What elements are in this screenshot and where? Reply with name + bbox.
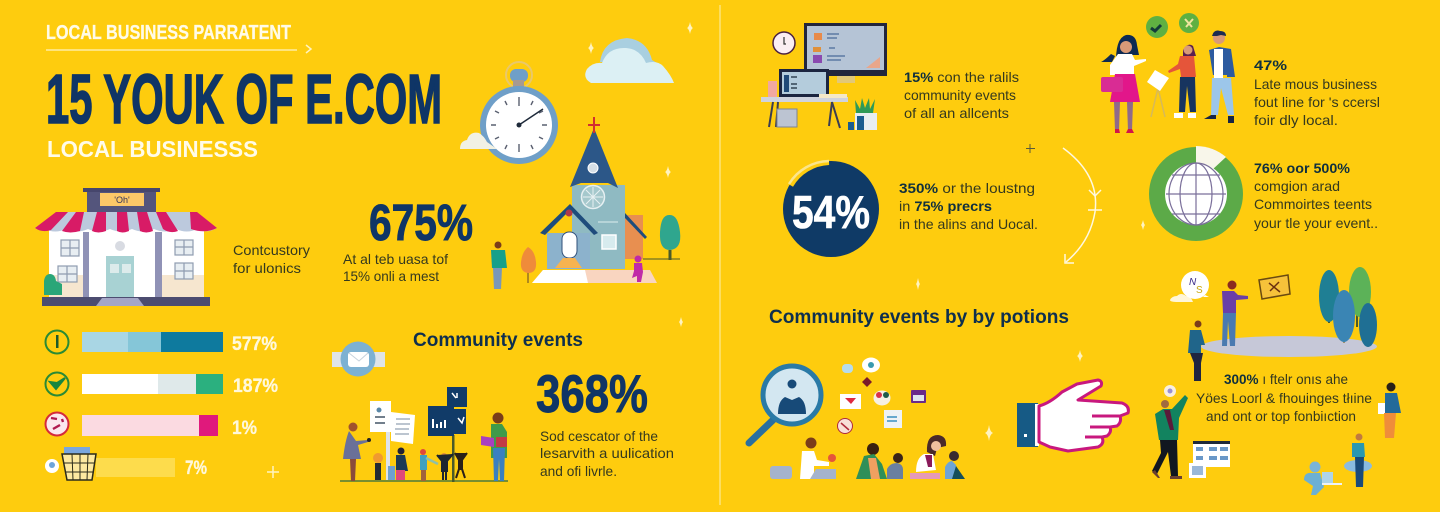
main title: 15 YOUK OF E.COM <box>46 60 442 138</box>
text: 47% <box>1254 57 1380 128</box>
text: 47%: fout line for 's ccersl <box>1254 94 1380 110</box>
speech bubble <box>1170 271 1209 302</box>
trees <box>1319 267 1377 347</box>
person lower <box>1344 434 1372 487</box>
seated woman <box>910 435 946 479</box>
dark plus <box>1026 144 1035 153</box>
children group <box>373 448 467 481</box>
donut: 54%: 54% <box>792 186 870 238</box>
bar row 2: 187% <box>233 376 278 397</box>
icon: pointing hand <box>1017 380 1128 451</box>
person with bag <box>343 422 371 481</box>
donut: globe <box>1149 146 1243 241</box>
person right <box>1378 382 1401 438</box>
man with jacket <box>1204 31 1235 123</box>
seated child <box>887 453 903 479</box>
arrow: curved <box>1063 148 1102 263</box>
text: 76%: comgion arad <box>1254 178 1340 194</box>
text: 47%: Late mous business <box>1254 76 1377 92</box>
speech bubble: N <box>1189 277 1197 288</box>
icon: calendar <box>1189 441 1230 478</box>
bar row 4: 7% <box>185 458 207 479</box>
person: green coat <box>1152 385 1188 479</box>
illustration: storefront: 'Oh' <box>114 195 130 205</box>
sign <box>1259 275 1290 299</box>
eyebrow heading: LOCAL BUSINESS PARRATENT <box>46 22 291 44</box>
text: 15%: of all an allcents <box>904 105 1009 121</box>
stat: 675%: 15% onli a mest <box>343 268 439 284</box>
bar chart <box>45 330 278 480</box>
text: 350%: in the alins and Uocal. <box>899 216 1038 232</box>
woman <box>1101 35 1146 133</box>
text: 300% <box>1196 371 1372 424</box>
bar row 1: 577% <box>232 334 277 355</box>
illustration: cloud <box>585 38 674 83</box>
person teal <box>1188 320 1205 381</box>
text: 76%: your tle your event.. <box>1254 215 1378 231</box>
text: 76% <box>1254 160 1378 231</box>
caption: store: for ulonics <box>233 260 301 276</box>
text: 76%: Commoirtes teents <box>1254 196 1372 212</box>
illustration: community signs <box>340 387 508 482</box>
illustration: people seated <box>770 435 965 479</box>
speech bubble: S <box>1196 285 1203 296</box>
stat: 368%: and ofi livrle. <box>540 463 617 479</box>
text: 15%: 15% con the ralils <box>904 69 1019 85</box>
caption: store: Contcustory <box>233 242 310 258</box>
text: 15% <box>904 69 1019 121</box>
bar row 4 <box>45 447 207 480</box>
text: 76%: 76% oor 500% <box>1254 160 1351 176</box>
seated girl <box>945 451 965 479</box>
text: 47%: foir dly local. <box>1254 112 1338 128</box>
person in pink <box>632 256 643 282</box>
stat: 368%: lesarvith a uulication <box>540 445 674 461</box>
illustration: church <box>491 117 680 289</box>
stat: 675% <box>343 194 473 284</box>
text: 47%: 47% <box>1254 57 1288 73</box>
stat: 675%: At al teb uasa tof <box>343 251 448 267</box>
heading: community events by potions: Community events by by potions <box>769 307 1069 328</box>
subtitle: LOCAL BUSINESSS <box>47 136 258 162</box>
stat: 368% <box>536 365 674 479</box>
sparkle <box>267 466 279 478</box>
seated person 1 <box>800 438 836 479</box>
floating icons <box>838 358 926 434</box>
bar row 3: 1% <box>232 418 257 439</box>
text: 350%: in 75% precrs <box>899 198 992 214</box>
stat: 368%: Sod cescator of the <box>540 428 658 444</box>
illustration: magnifier <box>749 366 821 443</box>
person with book <box>481 412 507 481</box>
middle person <box>1168 45 1196 118</box>
seated person 2 <box>856 443 887 479</box>
illustration: desk with computer <box>761 23 887 130</box>
sparkles <box>588 22 1145 441</box>
bar row 2 <box>46 372 278 397</box>
icon: envelope badge <box>332 342 385 376</box>
text: 300%: Yöes Loorl & fhouinges tłıine <box>1196 390 1372 406</box>
bar row 3 <box>46 412 257 439</box>
eyebrow heading <box>46 22 311 53</box>
heading: community events: Community events <box>413 330 583 351</box>
illustration: storefront <box>35 188 217 306</box>
text: 300%: 300% ı ftelr onıs ahe <box>1224 371 1348 387</box>
text: 300%: and ont or top fonbiıction <box>1206 408 1356 424</box>
stat: 368%: 368% <box>536 365 648 424</box>
text: 15%: community events <box>904 87 1016 103</box>
illustration: three people with board <box>1101 13 1235 133</box>
person left of church <box>491 242 507 289</box>
badges <box>1146 13 1199 38</box>
text: 350% <box>899 180 1038 232</box>
stat: 675%: 675% <box>369 194 473 251</box>
donut: 54% <box>783 161 879 257</box>
text: 350%: 350% or the loustng <box>899 180 1035 196</box>
person seated laptop <box>1304 462 1342 495</box>
illustration: stopwatch <box>460 62 558 164</box>
illustration: park scene <box>1170 267 1377 381</box>
board <box>1147 70 1169 117</box>
person purple <box>1222 280 1248 346</box>
bar row 1 <box>46 330 277 355</box>
caption: store <box>233 242 310 276</box>
